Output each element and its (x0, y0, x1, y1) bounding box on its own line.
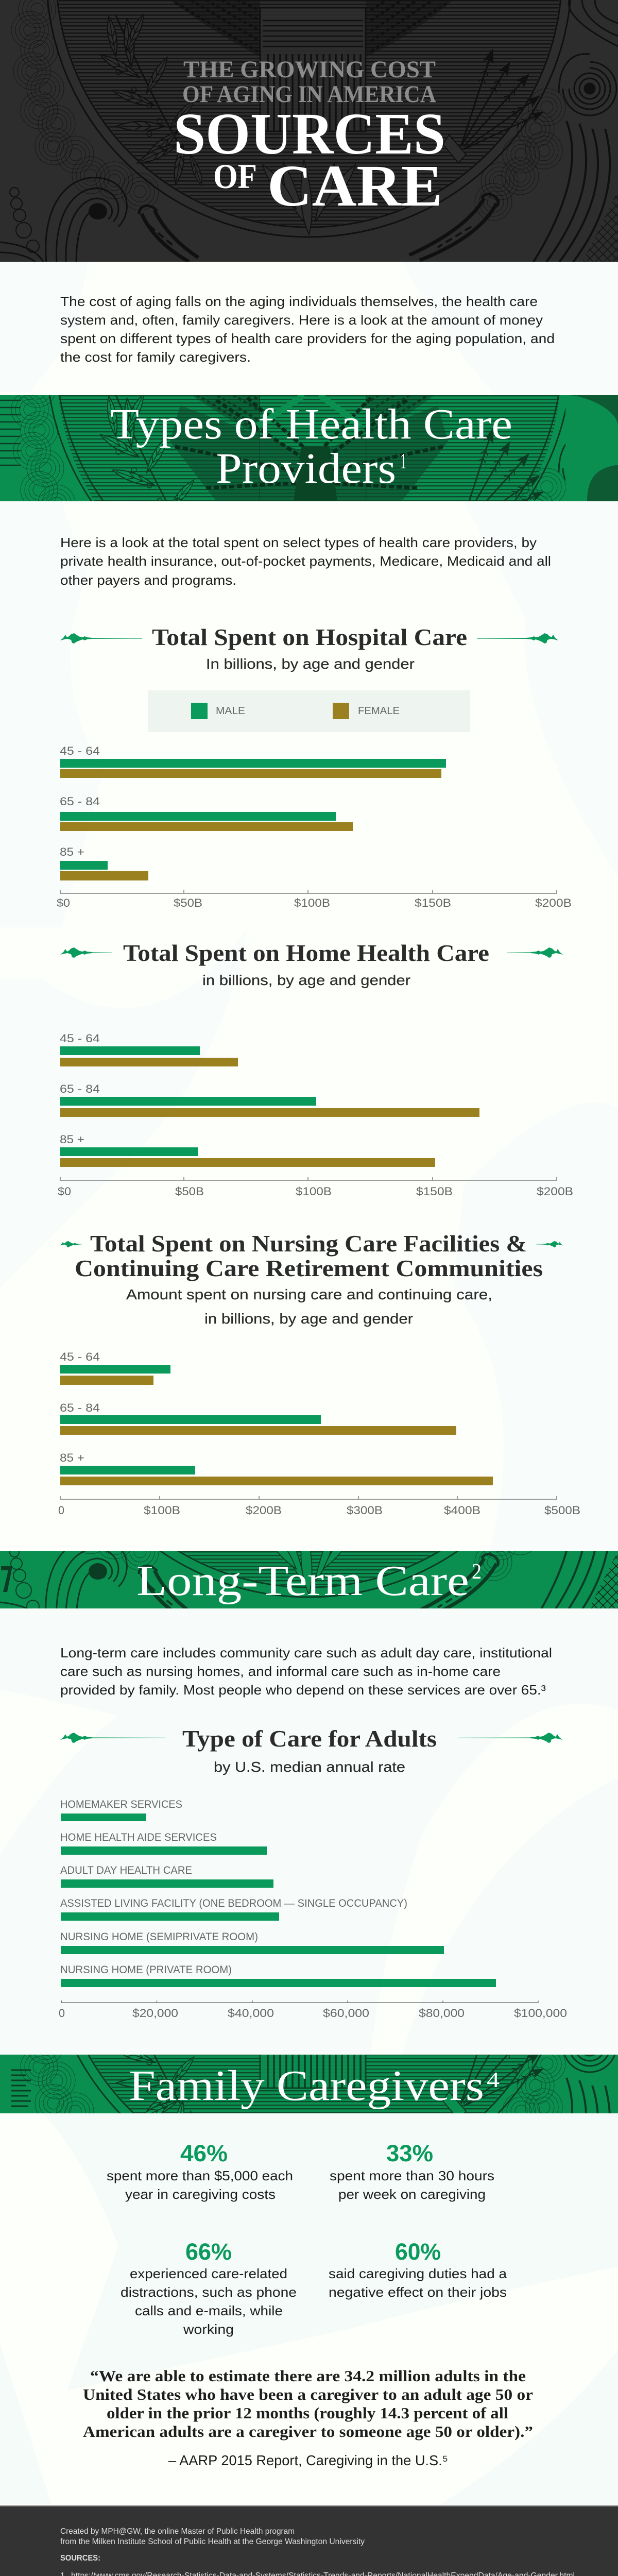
chart title: Total Spent on Home Health Care (123, 940, 489, 966)
x axis: $100,000 (514, 2007, 567, 2020)
chart panel: home health care (58, 940, 573, 1198)
pull quote: older in the prior 12 months (roughly 14.3 percent of all (107, 2404, 508, 2422)
x axis: $500B (544, 1504, 580, 1517)
bar group: 65-84 (60, 1082, 479, 1117)
main title: OF (213, 157, 257, 196)
chart panel: type of care for adults (59, 1725, 567, 2020)
sources heading: SOURCES: (60, 2554, 100, 2563)
x axis: $0 (58, 1185, 71, 1198)
bar group: 45-64: 45 - 64 (60, 1032, 100, 1045)
banner title: Long-Term Care (136, 1557, 469, 1605)
ornament right (477, 633, 558, 643)
header eyebrow title: THE GROWING COST (183, 56, 436, 83)
stat: 60%: 60% (395, 2239, 441, 2265)
chart subtitle: in billions, by age and gender (204, 1311, 413, 1327)
chart panel: nursing care facilities (58, 1230, 580, 1517)
paragraph: long-term care (60, 1645, 552, 1698)
x axis: $300B (347, 1504, 383, 1517)
chart subtitle: In billions, by age and gender (206, 656, 415, 672)
paragraph: long-term care: Long-term care includes community care such as adult day care, institutional (60, 1645, 552, 1660)
x axis: $200B (535, 896, 572, 909)
bar group: 65-84: 65 - 84 (60, 1082, 100, 1095)
x axis: 0 (59, 2007, 65, 2020)
pull quote: American adults are a caregiver to someone age 50 or older).” (83, 2422, 533, 2441)
row: home health aide services (60, 1832, 267, 1855)
paragraph: long-term care: provided by family. Most people who depend on these services are over 65.³ (60, 1682, 546, 1698)
intro paragraph: the cost for family caregivers. (60, 349, 251, 365)
row: adult day health care: ADULT DAY HEALTH CARE (60, 1865, 192, 1876)
header background: engraved dollar seal (0, 0, 618, 263)
footer (0, 2505, 618, 2576)
stat: 46%: spent more than $5,000 each (107, 2168, 293, 2183)
legend: female (333, 703, 400, 719)
intro paragraph: system and, often, family caregivers. Here is a look at the amount of money (60, 312, 543, 328)
section banner: types of health care providers (0, 91, 618, 642)
bar group: 65-84: 65 - 84 (60, 795, 100, 808)
ornament left (60, 633, 142, 643)
ornament left (60, 1241, 82, 1247)
chart subtitle (126, 1286, 492, 1327)
banner background (0, 1551, 618, 1608)
chart panel: hospital care (57, 624, 572, 909)
stat: 33%: spent more than 30 hours (330, 2168, 494, 2183)
bar group: 85+: 85 + (60, 845, 84, 858)
bar group: 45-64: 45 - 64 (60, 1350, 100, 1363)
chart title: Type of Care for Adults (182, 1725, 437, 1752)
x axis: $0 (57, 896, 70, 909)
credit (60, 2527, 365, 2546)
paragraph: providers (60, 535, 551, 588)
row: nursing home semiprivate (60, 1931, 444, 1954)
row: nursing home private: NURSING HOME (PRIVATE ROOM) (60, 1964, 232, 1976)
paragraph: providers: other payers and programs. (60, 572, 236, 588)
quote attribution: – AARP 2015 Report, Caregiving in the U.S.⁵ (168, 2452, 448, 2468)
stat: 66%: 66% (185, 2239, 232, 2265)
main title (174, 101, 445, 218)
x axis: $150B (416, 1185, 453, 1198)
chart title: Total Spent on Hospital Care (152, 624, 467, 650)
bar group: 65-84 (60, 1401, 456, 1435)
banner background (0, 2055, 618, 2113)
credit: Created by MPH@GW, the online Master of Public Health program (60, 2527, 295, 2536)
x axis: $40,000 (228, 2007, 274, 2020)
chart title: Total Spent on Nursing Care Facilities & (90, 1230, 527, 1257)
row: home health aide services: HOME HEALTH AIDE SERVICES (60, 1832, 217, 1843)
main title: SOURCES (174, 101, 445, 166)
legend (148, 690, 470, 732)
x axis: $400B (444, 1504, 480, 1517)
bar group: 85+ (60, 845, 148, 880)
x axis (58, 1177, 573, 1198)
x axis: $200B (246, 1504, 282, 1517)
pull quote: United States who have been a caregiver to an adult age 50 or (83, 2385, 533, 2403)
stat: 66%: working (183, 2321, 234, 2337)
main title: CARE (267, 153, 442, 218)
bar group: 65-84: 65 - 84 (60, 1401, 100, 1414)
ornament left (60, 1733, 166, 1743)
stat: 33% (330, 2140, 494, 2202)
x axis: $50B (175, 1185, 204, 1198)
row: homemaker services: HOMEMAKER SERVICES (60, 1799, 182, 1810)
ornament left (60, 947, 112, 958)
x axis: $200B (537, 1185, 573, 1198)
banner title: 1 (400, 450, 406, 473)
chart subtitle: Amount spent on nursing care and continuing care, (126, 1286, 492, 1302)
chart title: Continuing Care Retirement Communities (75, 1255, 543, 1281)
banner title: 4 (487, 2069, 500, 2092)
bar group: 65-84 (60, 795, 353, 831)
x axis: $50B (174, 896, 202, 909)
row: assisted living facility: ASSISTED LIVING FACILITY (ONE BEDROOM — SINGLE OCCUPANCY) (60, 1897, 407, 1909)
stat: 33%: 33% (386, 2140, 433, 2166)
chart subtitle: in billions, by age and gender (202, 972, 410, 988)
row: homemaker services (60, 1799, 182, 1821)
bar group: 85+: 85 + (60, 1451, 84, 1464)
ornament right (453, 1733, 562, 1743)
bar group: 45-64 (60, 1350, 170, 1385)
x axis (58, 1496, 580, 1517)
x axis: $100B (296, 1185, 332, 1198)
bar group: 45-64: 45 - 64 (60, 744, 100, 757)
intro paragraph (60, 294, 555, 365)
paragraph: providers: Here is a look at the total spent on select types of health care providers, by (60, 535, 537, 550)
stat: 66%: calls and e-mails, while (135, 2303, 283, 2318)
credit: from the Milken Institute School of Public Health at the George Washington University (60, 2537, 365, 2546)
stat: 46%: year in caregiving costs (125, 2187, 276, 2202)
stat: 46%: 46% (180, 2140, 228, 2166)
ornament right (507, 947, 563, 958)
stat: 66%: distractions, such as phone (121, 2284, 297, 2300)
bar group: 85+ (60, 1133, 435, 1167)
bar group: 85+: 85 + (60, 1133, 84, 1146)
banner background (0, 395, 618, 501)
stat: 66% (121, 2239, 297, 2337)
chart title (75, 1230, 543, 1281)
header eyebrow title: OF AGING IN AMERICA (182, 81, 436, 108)
header banner (0, 0, 618, 263)
paragraph: providers: private health insurance, out-of-pocket payments, Medicare, Medicaid and all (60, 553, 551, 569)
stat: 60% (329, 2239, 507, 2300)
bar group: 45-64 (60, 744, 446, 778)
x axis: $100B (294, 896, 330, 909)
header eyebrow title (182, 56, 436, 108)
pull quote (83, 2367, 533, 2468)
intro paragraph: The cost of aging falls on the aging individuals themselves, the health care (60, 294, 538, 309)
pull quote: “We are able to estimate there are 34.2 million adults in the (90, 2367, 526, 2385)
section banner: family caregivers (0, 1668, 618, 2219)
x axis: $20,000 (132, 2007, 178, 2020)
stat: 33%: per week on caregiving (338, 2187, 486, 2202)
stat: 46% (107, 2140, 293, 2202)
banner title: 2 (472, 1560, 482, 1584)
x axis: $80,000 (419, 2007, 465, 2020)
x axis: $150B (415, 896, 451, 909)
x axis: 0 (58, 1504, 64, 1517)
stat: 60%: said caregiving duties had a (329, 2266, 507, 2281)
banner title: Types of Health Care (110, 400, 512, 448)
row: adult day health care (60, 1865, 273, 1888)
x axis: $60,000 (323, 2007, 369, 2020)
section banner: long-term care (0, 1072, 618, 1623)
banner title: Providers (216, 445, 396, 493)
x axis (57, 890, 572, 909)
bar group: 85+ (60, 1451, 493, 1485)
legend: female: FEMALE (358, 705, 400, 717)
row: assisted living facility (60, 1897, 407, 1921)
x axis: $100B (144, 1504, 180, 1517)
legend: male: MALE (216, 705, 245, 717)
row: nursing home semiprivate: NURSING HOME (SEMIPRIVATE ROOM) (60, 1931, 258, 1943)
row: nursing home private (60, 1964, 496, 1987)
chart subtitle: by U.S. median annual rate (214, 1759, 405, 1775)
banner title: Family Caregivers (129, 2062, 484, 2110)
banner title (110, 400, 512, 493)
stat: 66%: experienced care-related (130, 2266, 287, 2281)
intro paragraph: spent on different types of health care providers for the aging population, and (60, 331, 555, 346)
paragraph: long-term care: care such as nursing homes, and informal care such as in-home care (60, 1664, 501, 1679)
ornament right (536, 1241, 563, 1247)
x axis (59, 2001, 567, 2020)
legend: male (191, 703, 245, 719)
bar group: 45-64 (60, 1032, 238, 1066)
stat: 60%: negative effect on their jobs (329, 2284, 507, 2300)
